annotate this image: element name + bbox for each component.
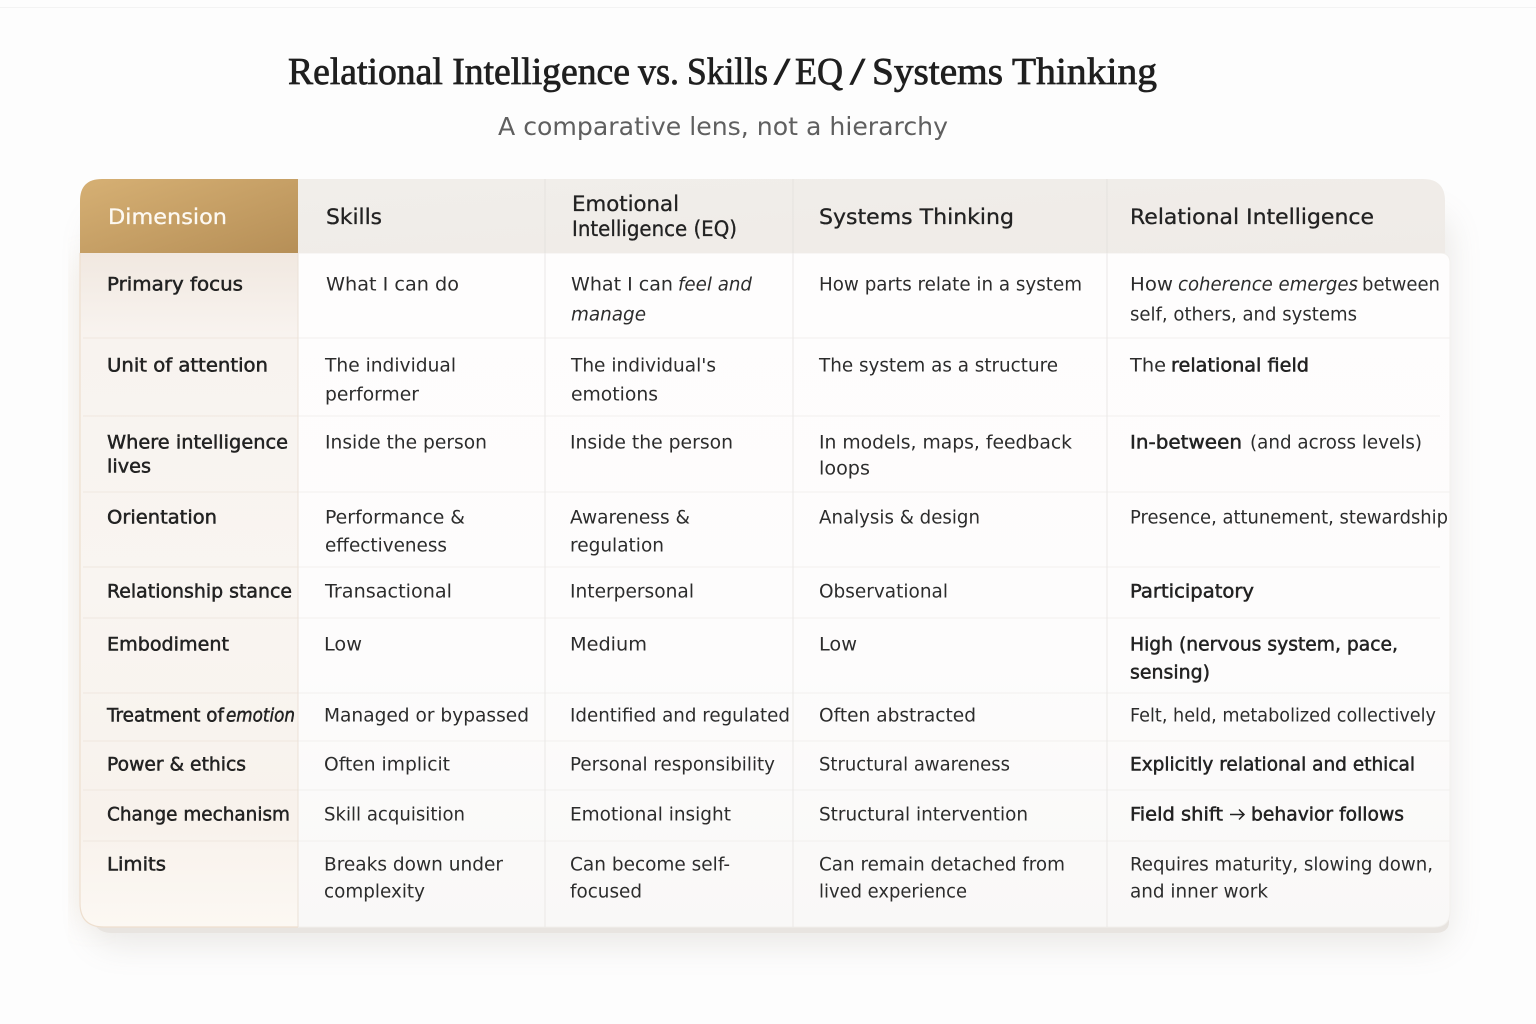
row label: Treatment of bbox=[106, 705, 225, 727]
skills cell: complexity bbox=[324, 881, 425, 903]
EQ cell: regulation bbox=[570, 535, 664, 557]
relational cell: relational field bbox=[1171, 355, 1309, 377]
skills cell: Inside the person bbox=[325, 432, 487, 454]
EQ cell: feel and bbox=[678, 274, 753, 296]
skills cell: Skill acquisition bbox=[324, 804, 465, 826]
relational cell bbox=[1130, 634, 1398, 684]
systems cell: loops bbox=[819, 458, 870, 480]
relational cell: Presence, attunement, stewardship bbox=[1130, 507, 1448, 529]
header cell: Emotional Intelligence: Emotional bbox=[572, 192, 679, 216]
row: Change mechanism bbox=[107, 804, 1404, 826]
EQ cell: Personal responsibility bbox=[570, 754, 775, 776]
EQ cell: Medium bbox=[570, 634, 647, 656]
row: Relationship stance bbox=[107, 581, 1254, 603]
card drop shadow bbox=[72, 215, 1450, 945]
title bbox=[288, 51, 1157, 93]
table bbox=[80, 179, 1450, 933]
systems cell: lived experience bbox=[819, 881, 967, 903]
systems cell: Often abstracted bbox=[819, 705, 976, 727]
header cell: Emotional Intelligence bbox=[572, 192, 737, 241]
row label: Unit of attention bbox=[107, 355, 268, 377]
relational cell: High (nervous system, pace, bbox=[1130, 634, 1398, 656]
EQ cell: Interpersonal bbox=[570, 581, 694, 603]
relational cell: Explicitly relational and ethical bbox=[1130, 754, 1415, 776]
header cell: Relational Intelligence: Relational Intelligence bbox=[1130, 205, 1374, 229]
relational cell: Participatory bbox=[1130, 581, 1254, 603]
EQ cell: Awareness & bbox=[570, 507, 690, 529]
systems cell bbox=[819, 854, 1065, 903]
skills cell: Performance & bbox=[325, 507, 465, 529]
relational cell: behavior follows bbox=[1251, 804, 1404, 826]
skills cell bbox=[324, 854, 503, 903]
EQ cell bbox=[570, 507, 690, 557]
header cell: Systems Thinking: Systems Thinking bbox=[819, 205, 1014, 229]
header cell: Skills: Skills bbox=[326, 205, 382, 229]
relational cell: Field shift bbox=[1130, 804, 1223, 826]
relational cell: How bbox=[1130, 274, 1173, 296]
EQ cell bbox=[570, 854, 730, 903]
row: Primary focus bbox=[107, 274, 1440, 326]
EQ cell: What I can bbox=[571, 274, 673, 296]
row: Limits bbox=[107, 854, 1433, 903]
row label: Limits bbox=[107, 854, 166, 876]
relational cell bbox=[1130, 854, 1433, 903]
relational cell bbox=[1130, 274, 1440, 326]
header cell: Emotional Intelligence: Intelligence (EQ) bbox=[572, 217, 737, 241]
EQ cell: manage bbox=[571, 304, 646, 326]
relational cell: sensing) bbox=[1130, 662, 1210, 684]
title: Skills bbox=[687, 51, 768, 93]
skills cell: Low bbox=[324, 634, 362, 656]
relational cell: (and across levels) bbox=[1250, 432, 1422, 454]
systems cell: In models, maps, feedback bbox=[819, 432, 1072, 454]
systems cell: Analysis & design bbox=[819, 507, 980, 529]
skills cell: Managed or bypassed bbox=[324, 705, 529, 727]
systems cell: How parts relate in a system bbox=[819, 274, 1082, 296]
relational cell: and inner work bbox=[1130, 881, 1268, 903]
header background bbox=[298, 179, 1445, 253]
title: / bbox=[774, 51, 791, 93]
skills cell: effectiveness bbox=[325, 535, 447, 557]
EQ cell: Can become self- bbox=[570, 854, 730, 876]
header cell: Dimension bbox=[80, 179, 298, 253]
skills cell: What I can do bbox=[326, 274, 459, 296]
skills cell: Often implicit bbox=[324, 754, 450, 776]
EQ cell: Inside the person bbox=[570, 432, 733, 454]
skills cell: The individual bbox=[324, 355, 456, 377]
table body background bbox=[80, 253, 1450, 927]
row: Embodiment bbox=[107, 634, 1398, 684]
skills cell: performer bbox=[325, 384, 419, 406]
row label: Embodiment bbox=[107, 634, 229, 656]
row label: emotion bbox=[226, 705, 295, 727]
header row bbox=[80, 179, 1445, 253]
row label bbox=[106, 705, 295, 727]
icon: arrow bbox=[1230, 810, 1244, 820]
skills cell bbox=[325, 507, 465, 557]
row: Power & ethics bbox=[107, 754, 1415, 776]
row label: Power & ethics bbox=[107, 754, 246, 776]
systems cell: Structural awareness bbox=[819, 754, 1010, 776]
title: Thinking bbox=[1012, 51, 1157, 93]
relational cell bbox=[1130, 804, 1404, 826]
systems cell: Structural intervention bbox=[819, 804, 1028, 826]
EQ cell: focused bbox=[570, 881, 642, 903]
EQ cell: emotions bbox=[571, 384, 658, 406]
row: Orientation bbox=[107, 507, 1448, 557]
relational cell: between bbox=[1362, 274, 1440, 296]
row label: Change mechanism bbox=[107, 804, 290, 826]
row label bbox=[107, 432, 288, 478]
row label: Orientation bbox=[107, 507, 217, 529]
title: vs. bbox=[638, 51, 679, 93]
systems cell: The system as a structure bbox=[818, 355, 1058, 377]
skills cell bbox=[324, 355, 456, 406]
relational cell: Felt, held, metabolized collectively bbox=[1130, 705, 1436, 727]
bottom edge slab bbox=[95, 920, 1449, 933]
EQ cell bbox=[571, 274, 753, 326]
title: EQ bbox=[795, 51, 843, 93]
header cell: Dimension: Dimension bbox=[108, 205, 227, 229]
systems cell bbox=[819, 432, 1072, 480]
EQ cell: Emotional insight bbox=[570, 804, 731, 826]
title: Relational Intelligence bbox=[288, 51, 630, 93]
row label: Primary focus bbox=[107, 274, 243, 296]
relational cell: self, others, and systems bbox=[1130, 304, 1357, 326]
title: Systems bbox=[872, 51, 1003, 93]
row: Unit of attention bbox=[107, 355, 1309, 406]
systems cell: Can remain detached from bbox=[819, 854, 1065, 876]
relational cell: In-between bbox=[1130, 432, 1242, 454]
systems cell: Low bbox=[819, 634, 857, 656]
title: / bbox=[850, 51, 866, 93]
skills cell: Breaks down under bbox=[324, 854, 503, 876]
row label: Relationship stance bbox=[107, 581, 292, 603]
subtitle: A comparative lens, not a hierarchy bbox=[498, 112, 948, 141]
row label: lives bbox=[107, 456, 151, 478]
relational cell: Requires maturity, slowing down, bbox=[1130, 854, 1433, 876]
EQ cell: The individual's bbox=[570, 355, 716, 377]
skills cell: Transactional bbox=[324, 581, 452, 603]
relational cell: coherence emerges bbox=[1178, 274, 1358, 296]
relational cell: The bbox=[1129, 355, 1166, 377]
row: Where intelligence lives bbox=[107, 432, 1422, 480]
EQ cell: Identified and regulated bbox=[570, 705, 790, 727]
systems cell: Observational bbox=[819, 581, 948, 603]
row: Treatment of emotion bbox=[106, 705, 1436, 727]
row label: Where intelligence bbox=[107, 432, 288, 454]
relational cell bbox=[1130, 432, 1422, 454]
EQ cell bbox=[570, 355, 716, 406]
